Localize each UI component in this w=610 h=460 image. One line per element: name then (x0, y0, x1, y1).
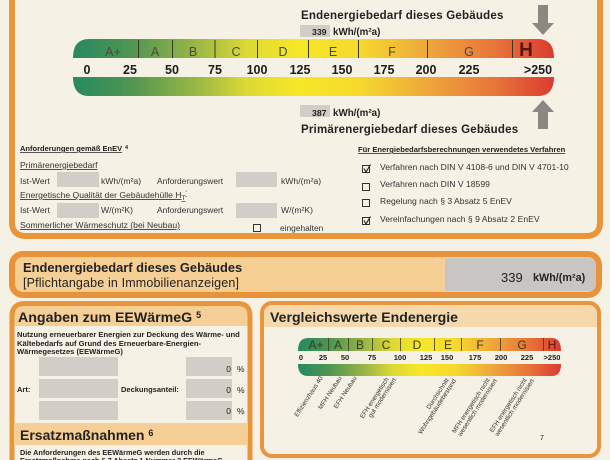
block: calculation methods: Vereinfachungen nach § 9 Absatz 2 EnEV (380, 214, 540, 224)
block: EnEV requirements: Ist-Wert (20, 176, 51, 186)
scale numbers (84, 63, 552, 77)
value: primary energy (300, 105, 380, 119)
scale bar: final energy classes: C (231, 45, 241, 59)
icon: arrow down (532, 5, 554, 35)
block: EnEV requirements: kWh/(m²a) (101, 176, 141, 186)
form rows: % (237, 364, 245, 374)
block: EnEV requirements: Primärenergiebedarf (20, 160, 98, 170)
block: calculation methods: Verfahren nach DIN V 4108-6 und DIN V 4701-10 (380, 162, 569, 172)
small scale numbers: >250 (544, 353, 560, 362)
small scale numbers: 125 (420, 353, 432, 362)
small scale numbers: 150 (441, 353, 453, 362)
small scale numbers: 200 (495, 353, 507, 362)
value: final energy (300, 25, 380, 38)
rotated building labels: Effizienzhaus 40 (293, 375, 325, 418)
scale bar: final energy classes (73, 39, 554, 61)
intro text: Nutzung erneuerbarer Energien zur Deckung des Wärme- und (17, 330, 240, 339)
panel: comparison values (262, 303, 599, 456)
rotated building labels: EFH Neubau (333, 375, 359, 410)
scale bar: final energy classes: H (519, 40, 533, 61)
small scale bar: F (476, 338, 484, 352)
block: EnEV requirements: 4 (125, 145, 129, 151)
small scale bar: G (517, 338, 527, 352)
small scale numbers: 75 (368, 353, 376, 362)
small scale numbers: 50 (341, 353, 349, 362)
heading: Ersatzmaßnahmen: 6 (148, 428, 153, 438)
scale numbers: >250 (524, 63, 552, 77)
heading: final energy demand: Endenergiebedarf dieses Gebäudes (301, 10, 504, 22)
scale numbers: 150 (332, 63, 352, 77)
heading: Ersatzmaßnahmen (14, 423, 248, 445)
scale numbers: 25 (123, 63, 137, 77)
rotated building labels: Wohngebäudebestand (417, 378, 458, 436)
small scale bar: A+ (308, 338, 324, 352)
panel: final energy summary (12, 254, 599, 295)
block: EnEV requirements: ' (185, 190, 187, 197)
heading: Angaben zum EEWärmeG: 5 (196, 310, 201, 320)
block: EnEV requirements: Anforderungen gemäß EnEV (20, 144, 122, 153)
rotated building labels: Durchschnitt (425, 377, 451, 411)
summary value: 339 (501, 270, 523, 285)
small gradient bar (298, 364, 561, 376)
rotated building labels (293, 373, 536, 439)
summary text (23, 260, 242, 290)
block: calculation methods: Verfahren nach DIN V 18599 (380, 179, 490, 189)
scale numbers: 75 (208, 63, 222, 77)
value: primary energy: 387 (312, 108, 327, 118)
block: calculation methods (358, 145, 569, 224)
heading: primary energy demand: Primärenergiebedarf dieses Gebäudes (301, 124, 518, 136)
scale numbers: 50 (165, 63, 179, 77)
small scale numbers: 175 (469, 353, 481, 362)
small scale bar (298, 338, 561, 352)
intro text (17, 330, 240, 356)
value: final energy: kWh/(m²a) (333, 27, 380, 38)
small scale bar: D (413, 338, 422, 352)
summary value (501, 270, 586, 285)
form rows: Deckungsanteil: (121, 385, 179, 394)
summary value: kWh/(m²a) (533, 272, 586, 284)
panel: energy certificate top (12, 0, 600, 236)
scale bar: final energy classes: B (189, 45, 197, 59)
scale numbers: 175 (374, 63, 394, 77)
footnote number: 7 (540, 435, 544, 442)
block: EnEV requirements (20, 144, 324, 233)
small scale bar: A (334, 338, 342, 352)
form rows (17, 357, 245, 420)
rotated building labels: wesentlich modernisiert (493, 378, 536, 439)
small scale bar: H (548, 338, 556, 352)
block: EnEV requirements: Anforderungswert (157, 205, 224, 215)
scale bar: final energy classes: A (151, 45, 160, 59)
block: EnEV requirements: T (181, 195, 185, 202)
heading: Angaben zum EEWärmeG: Angaben zum EEWärmeG (18, 310, 192, 326)
scale numbers: 225 (459, 63, 479, 77)
block: EnEV requirements: W/(m²K) (281, 205, 313, 215)
rotated building labels: EFH energetisch (359, 376, 391, 420)
small scale numbers (299, 353, 560, 362)
small scale numbers: 0 (299, 353, 303, 362)
block: EnEV requirements: Energetische Qualität der Gebäudehülle H (20, 190, 181, 200)
small scale numbers: 225 (521, 353, 533, 362)
form rows: Art: (17, 385, 30, 394)
form rows: % (237, 406, 245, 416)
small scale bar: C (382, 338, 391, 352)
summary text: [Pflichtangabe in Immobilienanzeigen] (23, 276, 239, 290)
value: final energy: 339 (312, 27, 327, 37)
rotated building labels: EFH energetisch nicht (489, 377, 529, 434)
scale bar: final energy classes: A+ (105, 45, 121, 59)
block: EnEV requirements: Sommerlicher Wärmeschutz (bei Neubau) (20, 220, 180, 230)
block: EnEV requirements: W/(m²K) (101, 205, 133, 215)
intro text: Kältebedarfs auf Grund des Erneuerbare-Energien- (17, 339, 201, 348)
form rows: 0 (226, 385, 231, 395)
scale bar: final energy classes: F (388, 45, 396, 59)
heading: Vergleichswerte Endenergie: Vergleichswerte Endenergie (270, 309, 458, 325)
small scale bar: B (356, 338, 364, 352)
intro text: Wärmegesetzes (EEWärmeG) (17, 347, 123, 356)
block: calculation methods: Für Energiebedarfsberechnungen verwendetes Verfahren (358, 145, 566, 154)
rotated building labels: MFH energetisch nicht (451, 377, 492, 435)
small scale numbers: 25 (319, 353, 327, 362)
block: EnEV requirements: Ist-Wert (20, 205, 51, 215)
scale numbers: 0 (84, 63, 91, 77)
heading: Ersatzmaßnahmen: Ersatzmaßnahmen (20, 427, 144, 443)
scale numbers: 100 (247, 63, 267, 77)
small scale numbers: 100 (394, 353, 406, 362)
form rows: 0 (226, 406, 231, 416)
block: calculation methods: Regelung nach § 3 Absatz 5 EnEV (380, 196, 512, 206)
block: EnEV requirements: kWh/(m²a) (281, 176, 321, 186)
replacement measures text (20, 448, 223, 460)
block: EnEV requirements: Anforderungswert (157, 176, 224, 186)
scale numbers: 125 (290, 63, 310, 77)
scale bar: final energy classes: D (278, 45, 288, 59)
scale bar: final energy classes: G (464, 45, 474, 59)
rotated building labels: MFH Neubau (317, 375, 344, 411)
scale bar: final energy classes: E (329, 45, 337, 59)
rotated building labels: gut modernisiert (367, 377, 398, 419)
form rows: % (237, 385, 245, 395)
form rows: 0 (226, 364, 231, 374)
panel: EEWärmeG (12, 303, 250, 460)
value: primary energy: kWh/(m²a) (333, 108, 380, 119)
replacement measures text: Die Anforderungen des EEWärmeG werden durch die (20, 448, 205, 457)
scale numbers: 200 (416, 63, 436, 77)
rotated building labels: wesentlich modernisiert (456, 378, 499, 439)
summary text: Endenergiebedarf dieses Gebäudes (23, 260, 242, 275)
icon: arrow up (532, 100, 554, 129)
small scale bar: E (444, 338, 452, 352)
block: EnEV requirements: eingehalten (280, 223, 324, 233)
gradient bar (73, 77, 554, 96)
